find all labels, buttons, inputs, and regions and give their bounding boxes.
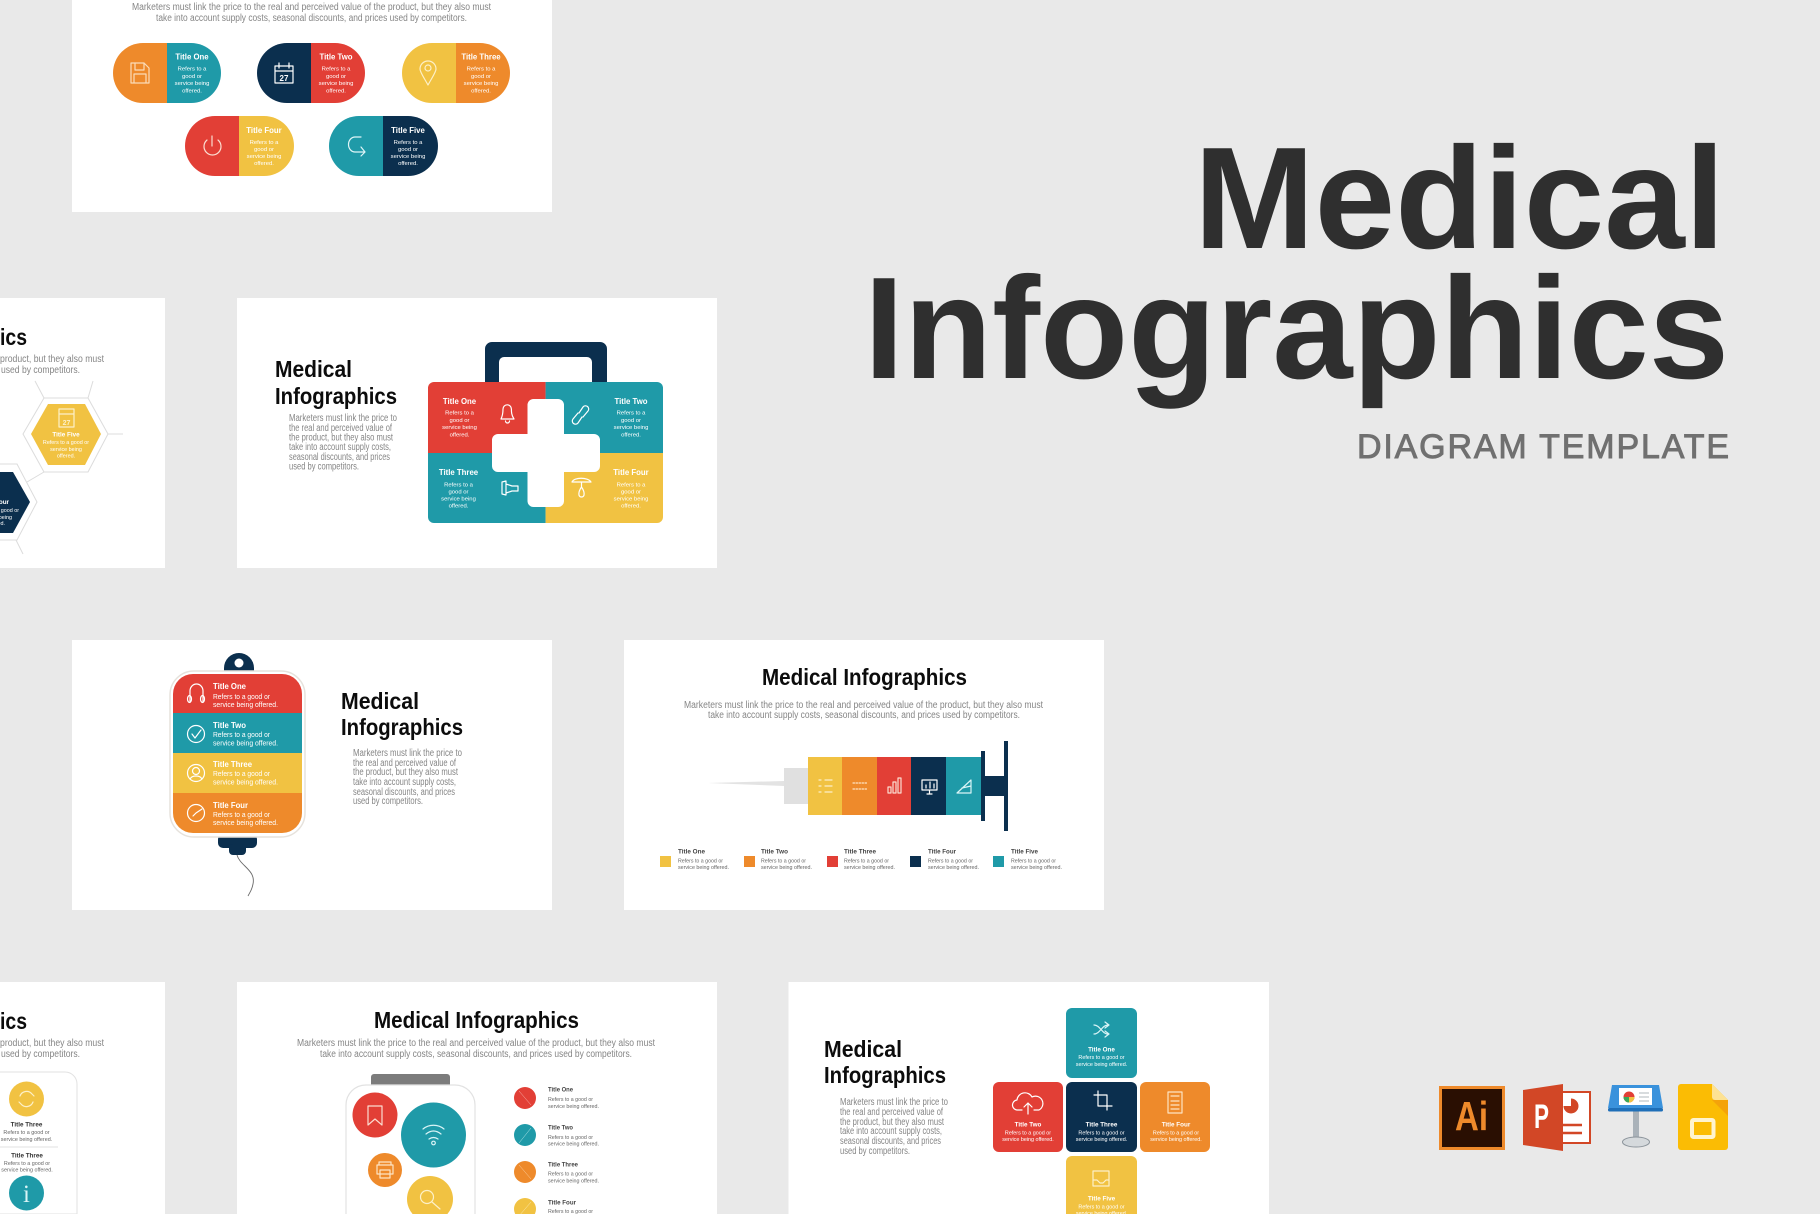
list item: title two: service being offered.	[548, 1142, 599, 1148]
kit section: title three	[439, 468, 518, 510]
list item: title four	[514, 1198, 593, 1214]
list item: title one: Refers to a good or	[548, 1097, 593, 1103]
tile: title one	[1066, 1008, 1137, 1078]
list item: title two: Refers to a good or	[548, 1135, 593, 1141]
text block: description: the real and perceived value of	[353, 758, 456, 769]
panel: syringe slide	[624, 640, 1104, 910]
tile: title one: Title One	[1088, 1046, 1115, 1054]
bag band: title two: Refers to a good or	[213, 732, 271, 739]
text block: description: seasonal discounts, and prices	[353, 787, 455, 798]
circle: refresh icon	[9, 1082, 44, 1116]
pill four: Title Four	[246, 126, 282, 135]
icon: Adobe Illustrator: Ai	[1455, 1093, 1488, 1139]
text block: title three upper: Refers to a good or	[3, 1130, 50, 1136]
pill five: Title Five	[391, 126, 425, 135]
subtitle: DIAGRAM TEMPLATE	[1357, 428, 1729, 466]
panel: cross tiles slide	[788, 982, 1269, 1214]
text block: description: take into account supply costs,	[353, 777, 456, 788]
pill three: Title Three	[461, 52, 501, 62]
heading	[275, 356, 397, 409]
tile: title four: service being offered.	[1150, 1137, 1202, 1143]
heading	[341, 688, 463, 740]
pill three: Refers to a	[467, 66, 496, 72]
text block: description: take into account supply costs, seasonal discounts, and prices used by competitors.	[708, 710, 1020, 721]
legend item: title two: Refers to a good or	[761, 858, 806, 864]
list item: title two: Title Two	[548, 1124, 573, 1132]
legend item: title four: Title Four	[928, 848, 957, 856]
list item: title one: Title One	[548, 1086, 573, 1094]
heading: Medical	[341, 688, 419, 714]
kit section: title one: good or	[450, 418, 470, 424]
list item: title one: service being offered.	[548, 1104, 599, 1110]
pill four	[185, 116, 294, 176]
kit section: title four: service being	[614, 496, 648, 502]
legend item: title two: service being offered.	[761, 865, 812, 871]
legend item: title four: Refers to a good or	[928, 858, 973, 864]
text block: description: Marketers must link the price to	[840, 1097, 948, 1108]
text block: description	[297, 1038, 655, 1060]
syringe plunger	[981, 741, 1008, 831]
text block: description: Marketers must link the price to the real and perceived value of the product, but they also must	[684, 700, 1043, 711]
legend item: title three: Refers to a good or	[844, 858, 889, 864]
bag outline	[170, 671, 305, 837]
text block: description: seasonal discounts, and prices	[289, 452, 390, 463]
hexagon: title four (cropped)	[0, 464, 37, 554]
text block: pill slide intro: take into account supply costs, seasonal discounts, and prices used by competitors.	[156, 13, 467, 24]
kit section: title three: good or	[449, 490, 469, 496]
bag band: title one: service being offered.	[213, 702, 278, 709]
main title	[864, 117, 1729, 409]
kit section: title one: service being	[442, 425, 477, 431]
text block: hexagon slide intro: product, but they also must	[0, 354, 104, 365]
pill two: service being	[319, 81, 353, 87]
text block: title three lower: Title Three	[11, 1152, 43, 1160]
icon: Google Slides	[1678, 1084, 1728, 1150]
legend item: title five: service being offered.	[1011, 865, 1062, 871]
text block: description	[684, 700, 1043, 721]
icon: Keynote	[1608, 1085, 1663, 1147]
pill two: good or	[326, 74, 346, 80]
text block: description: the real and perceived value of	[840, 1107, 943, 1118]
pill five	[329, 116, 438, 176]
heading: Medical Infographics	[762, 664, 967, 690]
tile: title three: Title Three	[1086, 1122, 1118, 1128]
text block: title three upper	[1, 1122, 52, 1143]
pill four: service being	[247, 154, 281, 160]
text block: description: used by competitors.	[353, 796, 423, 807]
bag outlet and tube	[218, 834, 257, 896]
first aid kit handle	[485, 342, 607, 384]
icon: PowerPoint	[1523, 1084, 1590, 1151]
kit section: title one	[442, 397, 514, 438]
hexagon: title four (cropped): good or	[1, 508, 19, 514]
text block: description: take into account supply costs,	[840, 1126, 942, 1137]
text block: title three lower	[1, 1152, 53, 1174]
panel: first aid kit slide	[237, 298, 717, 568]
list item: title three: Refers to a good or	[548, 1172, 593, 1178]
text block: description: take into account supply costs,	[289, 442, 391, 453]
bag band: title three	[173, 753, 302, 793]
text block: description: used by competitors.	[289, 462, 359, 472]
pill five: offered.	[398, 161, 418, 167]
legend	[660, 848, 1062, 871]
pill five: service being	[391, 154, 425, 160]
tile: title four: Title Four	[1162, 1122, 1191, 1128]
pill one: good or	[182, 74, 202, 80]
kit section: title one: offered.	[450, 432, 470, 438]
tile: title two: service being offered.	[1002, 1137, 1054, 1143]
heading	[824, 1036, 946, 1088]
main title: Medical	[1194, 117, 1725, 279]
heading: Infographics	[341, 714, 463, 740]
legend item: title one: service being offered.	[678, 865, 729, 871]
legend item: title four	[910, 848, 979, 871]
panel: hexagon slide (cropped)	[0, 298, 165, 568]
pill three	[402, 43, 510, 103]
hanger hole	[234, 658, 244, 668]
kit section: title four: Title Four	[613, 468, 649, 477]
legend item: title five: Refers to a good or	[1011, 858, 1056, 864]
kit section: title four: Refers to a	[617, 482, 646, 488]
kit section: title two: good or	[621, 418, 641, 424]
tile: title two: Refers to a good or	[1005, 1130, 1051, 1136]
text block: hexagon slide intro: used by competitors.	[1, 365, 80, 376]
hexagon: title five	[23, 381, 123, 482]
text block: description: the product, but they also must	[840, 1117, 944, 1128]
text block: description: the product, but they also must	[353, 767, 458, 778]
text block: title three lower: service being offered.	[1, 1168, 53, 1174]
legend item: title two	[744, 848, 812, 871]
heading: Medical	[275, 356, 352, 382]
list item: title two	[514, 1124, 599, 1148]
syringe barrel	[808, 757, 981, 815]
legend item: title five	[993, 848, 1062, 871]
pill: bookmark	[352, 1092, 398, 1138]
text block: description	[840, 1097, 948, 1157]
pill two: Title Two	[319, 52, 353, 62]
tile: title one: service being offered.	[1076, 1062, 1127, 1068]
kit section: title two: Title Two	[614, 397, 648, 406]
legend item: title one: Title One	[678, 848, 705, 856]
syringe hub	[784, 768, 808, 804]
text block: title three upper: service being offered.	[1, 1137, 52, 1143]
bag band: title two: service being offered.	[213, 740, 278, 748]
hexagon: title five: service being	[50, 447, 82, 453]
tile: title one: Refers to a good or	[1078, 1055, 1125, 1061]
pill three: good or	[471, 74, 491, 80]
pill five: Refers to a	[394, 140, 423, 146]
pill two: Refers to a	[322, 66, 351, 72]
bag band: title two: Title Two	[213, 721, 246, 730]
legend item: title three	[827, 848, 895, 871]
bag band: title four: service being offered.	[213, 820, 278, 827]
list item: title three: service being offered.	[548, 1178, 599, 1184]
kit section: title two	[572, 397, 648, 438]
pill one: offered.	[182, 88, 202, 94]
bag band: title one: Refers to a good or	[213, 694, 271, 701]
pill four: good or	[254, 147, 274, 153]
kit section: title one: Refers to a	[445, 410, 475, 416]
list item: title three: Title Three	[548, 1162, 578, 1168]
pill: printer	[368, 1153, 402, 1187]
kit section: title two: service being	[614, 425, 648, 431]
text block: title three upper: Title Three	[11, 1122, 43, 1128]
legend item: title two: Title Two	[761, 848, 788, 856]
bottle cap	[371, 1074, 450, 1086]
bag band: title three: service being offered.	[213, 780, 278, 786]
text block: hexagon slide intro	[0, 354, 104, 376]
text block: pill slide intro	[132, 2, 491, 24]
pill four: Refers to a	[250, 140, 279, 146]
tile: title four	[1140, 1082, 1210, 1152]
first aid kit body	[428, 382, 663, 523]
heading: Infographics	[824, 1062, 946, 1088]
text block: description: Marketers must link the price to	[289, 413, 397, 424]
text block: pill slide intro: Marketers must link the price to the real and perceived value of the product, but they also must	[132, 2, 491, 13]
pill two: offered.	[326, 88, 346, 94]
tile: title three: service being offered.	[1076, 1137, 1127, 1143]
bag band: title three: Title Three	[213, 760, 253, 769]
pill five: good or	[398, 147, 418, 153]
heading fragment: ics	[0, 324, 27, 350]
pill: magnifier	[407, 1176, 453, 1214]
tile: title two: Title Two	[1015, 1122, 1042, 1128]
text block: circles card intro: used by competitors.	[1, 1049, 80, 1060]
text block: description: the product, but they also must	[289, 432, 393, 444]
pill two	[257, 43, 365, 103]
legend item: title five: Title Five	[1011, 848, 1038, 856]
legend item: title three: Title Three	[844, 848, 876, 856]
text block: description	[289, 413, 397, 472]
bag band: title two	[173, 713, 302, 753]
legend item: title one	[660, 848, 729, 871]
panel: circles card slide (cropped)	[0, 982, 165, 1214]
text block: description: Marketers must link the price to the real and perceived value of the product, but they also must	[297, 1038, 655, 1049]
legend item: title one: Refers to a good or	[678, 858, 723, 864]
kit section: title two: Refers to a	[617, 410, 646, 416]
heading: Medical Infographics	[374, 1007, 579, 1033]
panel: pill bottle slide	[237, 982, 717, 1214]
text block: circles card intro	[0, 1038, 104, 1060]
text block: title three lower: Refers to a good or	[4, 1161, 50, 1167]
pill three: offered.	[471, 88, 491, 94]
kit section: title four	[572, 468, 649, 510]
heading fragment: ics	[0, 1008, 27, 1034]
bag band: title four: Title Four	[213, 801, 248, 810]
tile: title five: Refers to a good or	[1078, 1204, 1125, 1210]
text block: description: seasonal discounts, and prices	[840, 1136, 941, 1147]
tile: title four: Refers to a good or	[1153, 1130, 1199, 1136]
kit section: title three: service being	[441, 496, 476, 502]
kit section: title one: Title One	[443, 397, 477, 406]
bag band: title three: Refers to a good or	[213, 771, 271, 778]
hexagon: title five: Refers to a good or	[43, 440, 89, 446]
pill four: offered.	[254, 161, 274, 167]
hexagon: title five: Title Five	[52, 432, 80, 438]
circle: info icon	[9, 1176, 44, 1210]
bag band: title one: Title One	[213, 682, 247, 691]
text block: description: Marketers must link the price to	[353, 748, 462, 759]
tile: title two	[993, 1082, 1063, 1152]
bag band: title one	[173, 674, 302, 713]
pill one: service being	[175, 81, 209, 87]
icon: PowerPoint: P	[1534, 1098, 1549, 1136]
circle: info icon: i	[23, 1181, 30, 1208]
panel: pill slide	[72, 0, 552, 212]
bag band: title four: Refers to a good or	[213, 812, 271, 819]
kit section: title three: offered.	[449, 504, 469, 510]
heading: Medical	[824, 1036, 902, 1062]
list item: title three	[514, 1161, 599, 1184]
legend item: title three: service being offered.	[844, 865, 895, 871]
pill three: service being	[464, 81, 498, 87]
rounded card	[0, 1072, 77, 1214]
tile: title three	[1066, 1082, 1137, 1152]
hexagon: title five: 27	[63, 420, 70, 427]
kit section: title three: Refers to a	[444, 482, 474, 488]
bag hanger	[224, 653, 254, 672]
bottle outline	[346, 1085, 475, 1214]
main title: Infographics	[864, 247, 1729, 409]
icon: Adobe Illustrator	[1440, 1088, 1504, 1148]
tile: title five	[1066, 1156, 1137, 1214]
tile: title five: Title Five	[1088, 1196, 1116, 1202]
hexagon: title five: offered.	[57, 454, 75, 460]
tile: title three: Refers to a good or	[1078, 1130, 1125, 1136]
pill one: Refers to a	[178, 66, 207, 72]
panel: IV bag slide	[72, 640, 552, 910]
text block: description: used by competitors.	[840, 1146, 910, 1157]
pill one: Title One	[175, 52, 209, 62]
text block: description	[353, 748, 462, 807]
pill: wifi	[401, 1102, 466, 1168]
kit section: title three: Title Three	[439, 468, 479, 477]
legend item: title four: service being offered.	[928, 865, 979, 871]
kit section: title four: offered.	[621, 504, 641, 510]
syringe needle	[708, 781, 784, 786]
bag band: title four	[173, 793, 302, 833]
heading: Infographics	[275, 383, 397, 409]
pill one	[113, 43, 221, 103]
list item: title one	[514, 1086, 599, 1110]
pill two: 27	[280, 74, 289, 83]
list item: title four: Title Four	[548, 1200, 577, 1206]
text block: circles card intro: product, but they also must	[0, 1038, 104, 1049]
text block: description: the real and perceived value of	[289, 423, 392, 434]
kit section: title two: offered.	[621, 432, 641, 438]
kit section: title four: good or	[621, 490, 641, 496]
text block: description: take into account supply costs, seasonal discounts, and prices used by competitors.	[320, 1049, 632, 1060]
